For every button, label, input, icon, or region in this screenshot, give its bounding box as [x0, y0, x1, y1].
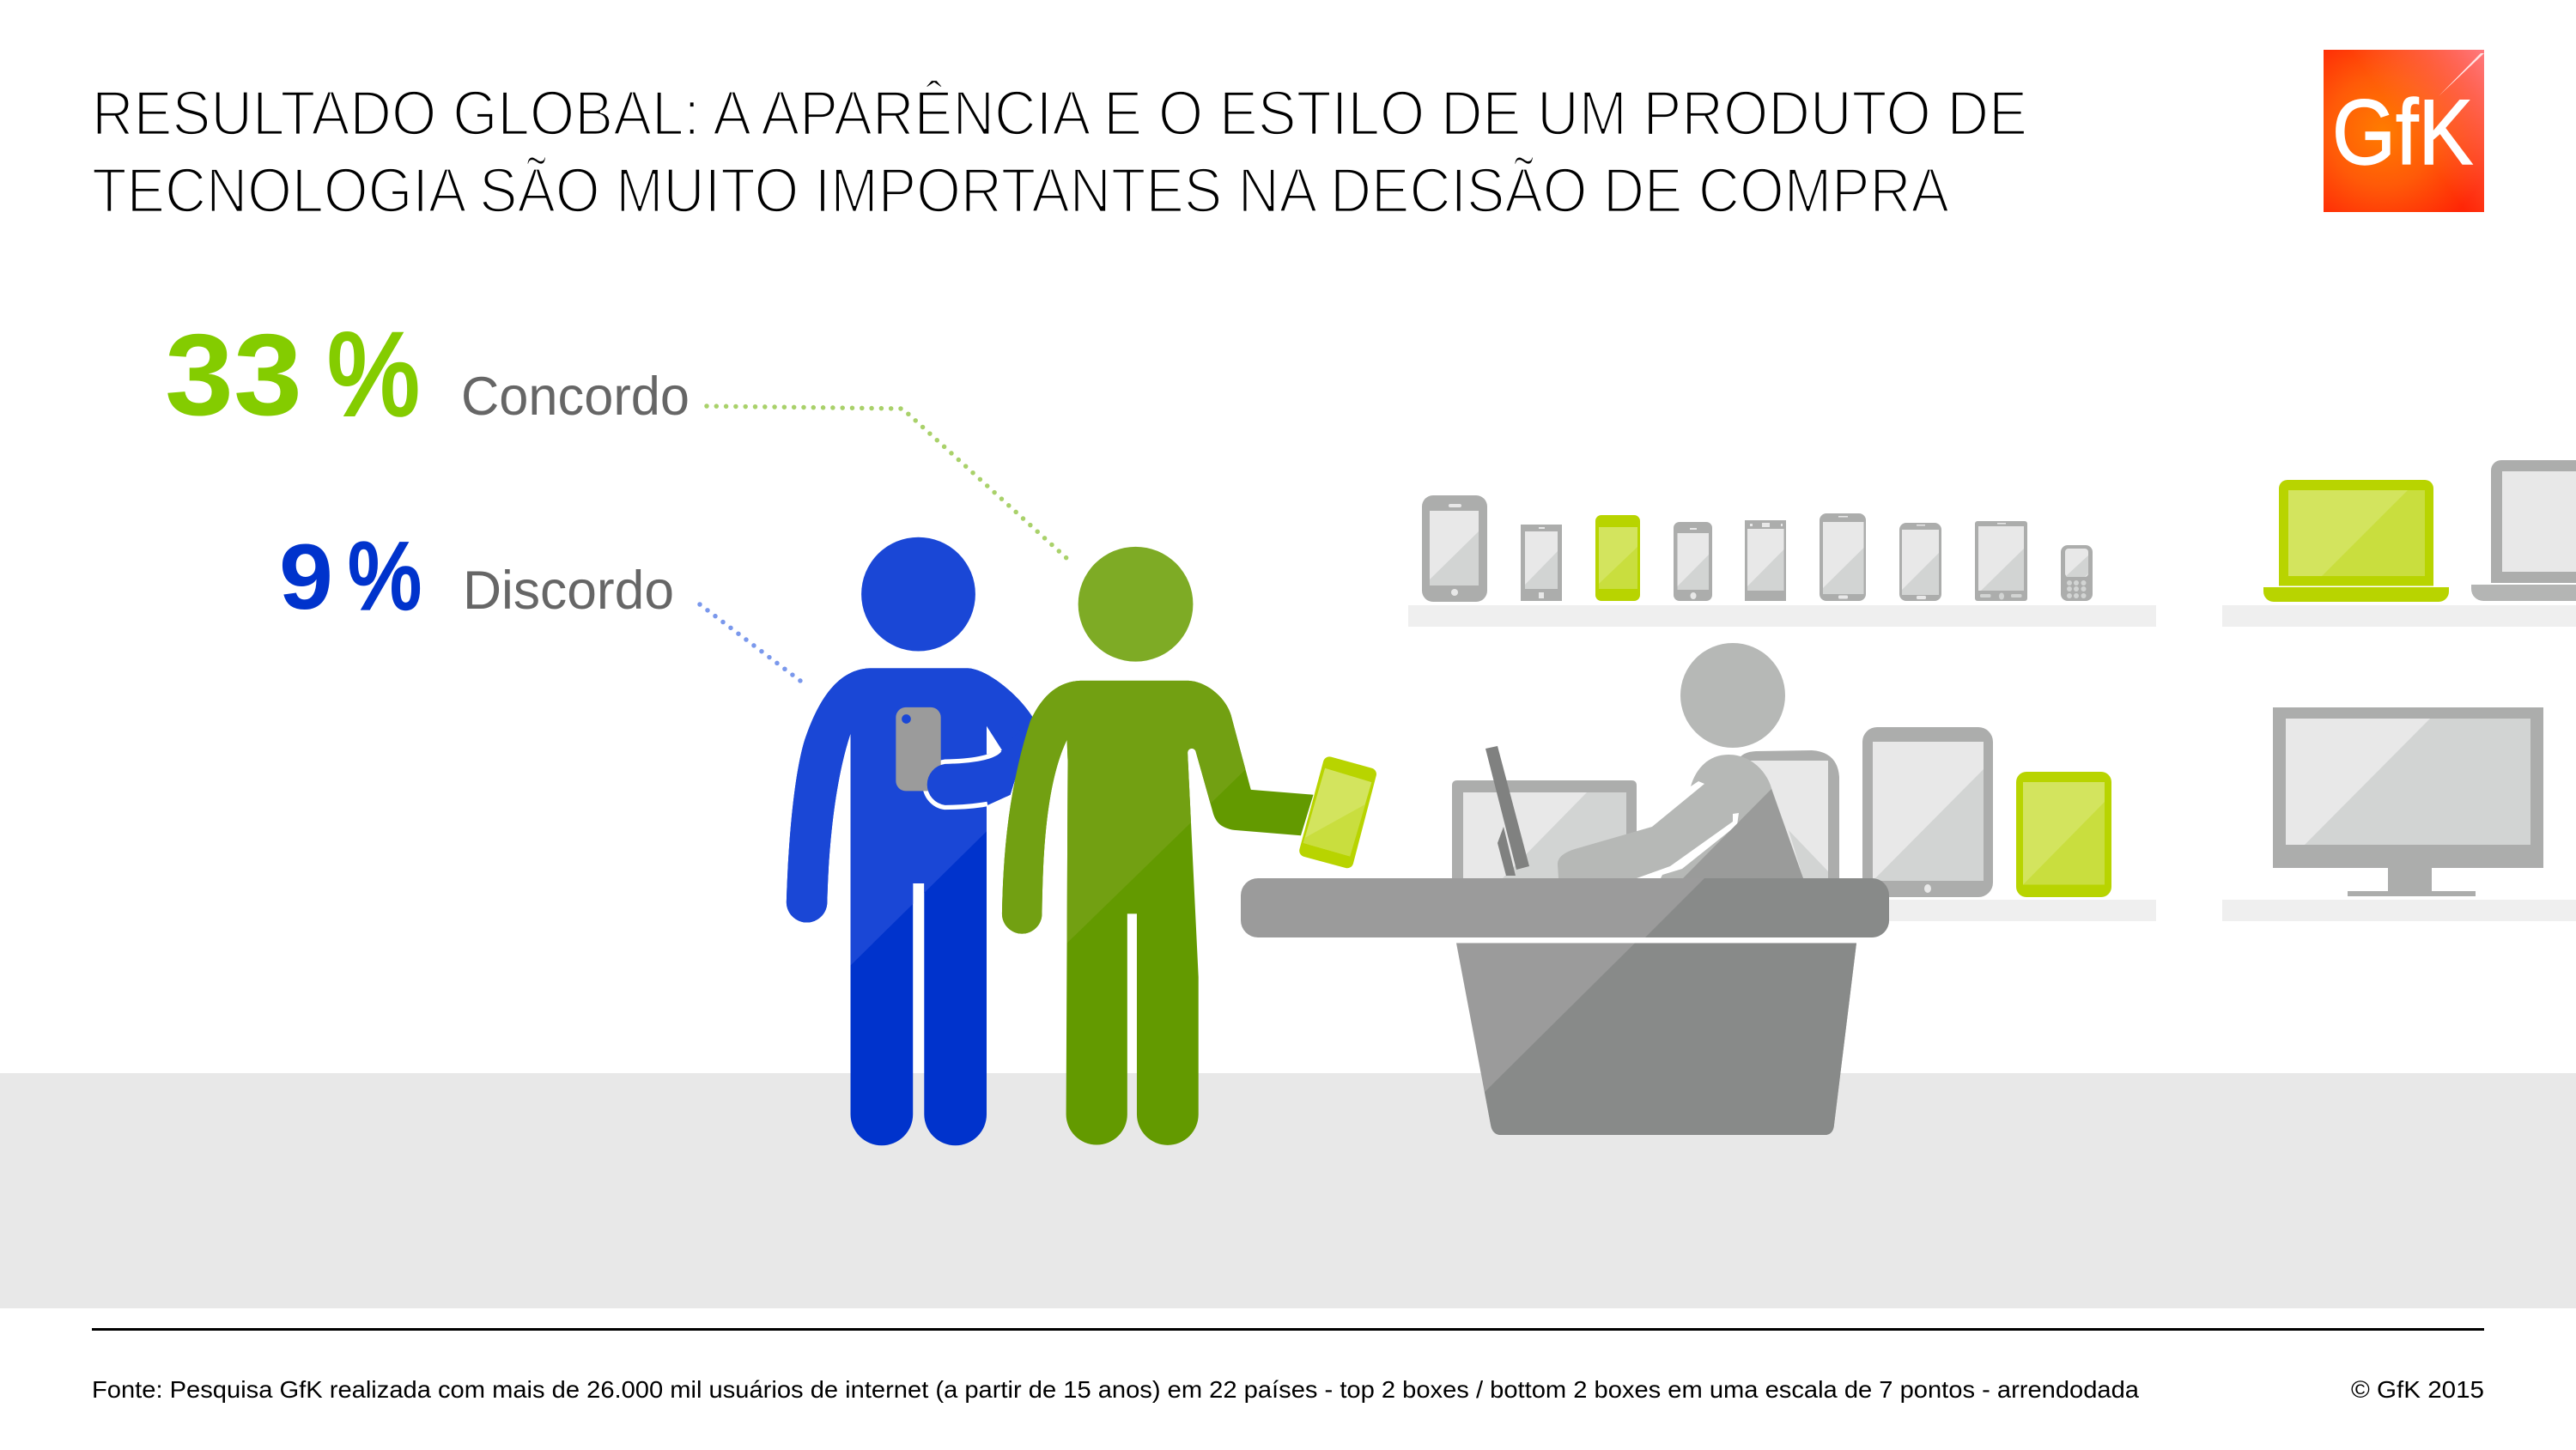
- shelf: top left: [1408, 605, 2156, 627]
- logo: GfK: GfK: [2332, 80, 2473, 184]
- phone held by green figure: [1303, 763, 1371, 862]
- phone 4: [1674, 522, 1712, 601]
- stat: 9% Discordo: Discordo: [463, 561, 674, 621]
- tablet: gray, behind worker: [1737, 750, 1839, 878]
- title: TECNOLOGIA SÃO MUITO IMPORTANTES NA DECISÃO DE COMPRA: [92, 156, 1949, 226]
- forearm: [927, 723, 1026, 805]
- counter: [1241, 878, 1889, 1135]
- connector: Concordo to green figure: [707, 406, 1066, 558]
- stat: 9% Discordo: [279, 524, 674, 629]
- stat: 33% Concordo: Concordo: [461, 367, 690, 427]
- laptop: gray, cropped at right edge: [2471, 460, 2576, 601]
- stat: 9% Discordo: 9: [279, 525, 333, 628]
- green figure with phone: [1002, 547, 1371, 1145]
- stat: 33% Concordo: 33: [165, 310, 302, 440]
- green body: [1002, 681, 1313, 1145]
- title: RESULTADO GLOBAL: A APARÊNCIA E O ESTILO DE UM PRODUTO DE: [92, 79, 2027, 149]
- blue head: [861, 537, 975, 651]
- floor: [0, 1073, 2576, 1308]
- worker body and arm: [1558, 755, 1803, 878]
- phone 6: [1820, 513, 1866, 601]
- logo: GfK: [2324, 50, 2484, 212]
- stat: 9% Discordo: %: [348, 524, 422, 629]
- title: [92, 79, 2027, 226]
- connector: Discordo to blue figure: [700, 604, 800, 681]
- phone held by blue figure: [896, 707, 941, 791]
- tablet: green: [2016, 772, 2111, 897]
- blue figure with phone: [787, 537, 1034, 1145]
- phone 5: [1745, 520, 1786, 601]
- laptop on counter: [1452, 780, 1637, 878]
- monitor: [2273, 707, 2543, 896]
- tablet: large gray: [1862, 727, 1993, 897]
- phone 2: [1521, 525, 1562, 601]
- shelf: top right: [2222, 605, 2576, 627]
- green head: [1078, 547, 1193, 662]
- white outline around forearm: [927, 751, 1001, 805]
- worker torso shadow: [1683, 789, 1803, 878]
- phone 9: keypad: [2061, 545, 2093, 601]
- stat: 33% Concordo: %: [327, 309, 420, 440]
- blue body: [787, 668, 1034, 1145]
- stat: 33% Concordo: [165, 309, 690, 440]
- laptop: green: [2263, 480, 2449, 602]
- footer rule: [92, 1328, 2484, 1331]
- copyright: © GfK 2015: [2351, 1376, 2484, 1403]
- phone 1: [1422, 495, 1487, 602]
- laptop lid and stand: side view: [1485, 746, 1529, 876]
- counter top: [1241, 878, 1889, 937]
- shelf: bottom left: [1408, 900, 2156, 921]
- worker behind the counter: [1558, 643, 1803, 878]
- phone 8: [1975, 521, 2027, 601]
- smartphones on top shelf: [1422, 495, 2093, 602]
- phone 7: [1899, 523, 1941, 601]
- worker head: [1680, 643, 1785, 748]
- gap between arm and torso: [1637, 813, 1739, 878]
- counter base: [1456, 943, 1856, 1135]
- source note: Fonte: Pesquisa GfK realizada com mais de 26.000 mil usuários de internet (a partir de 15 anos) em 22 países - top 2 boxes / bottom 2 boxes em uma escala de 7 pontos - arrendodada: [92, 1376, 2139, 1403]
- shelf: bottom right: [2222, 900, 2576, 921]
- phone 3: green: [1595, 515, 1640, 601]
